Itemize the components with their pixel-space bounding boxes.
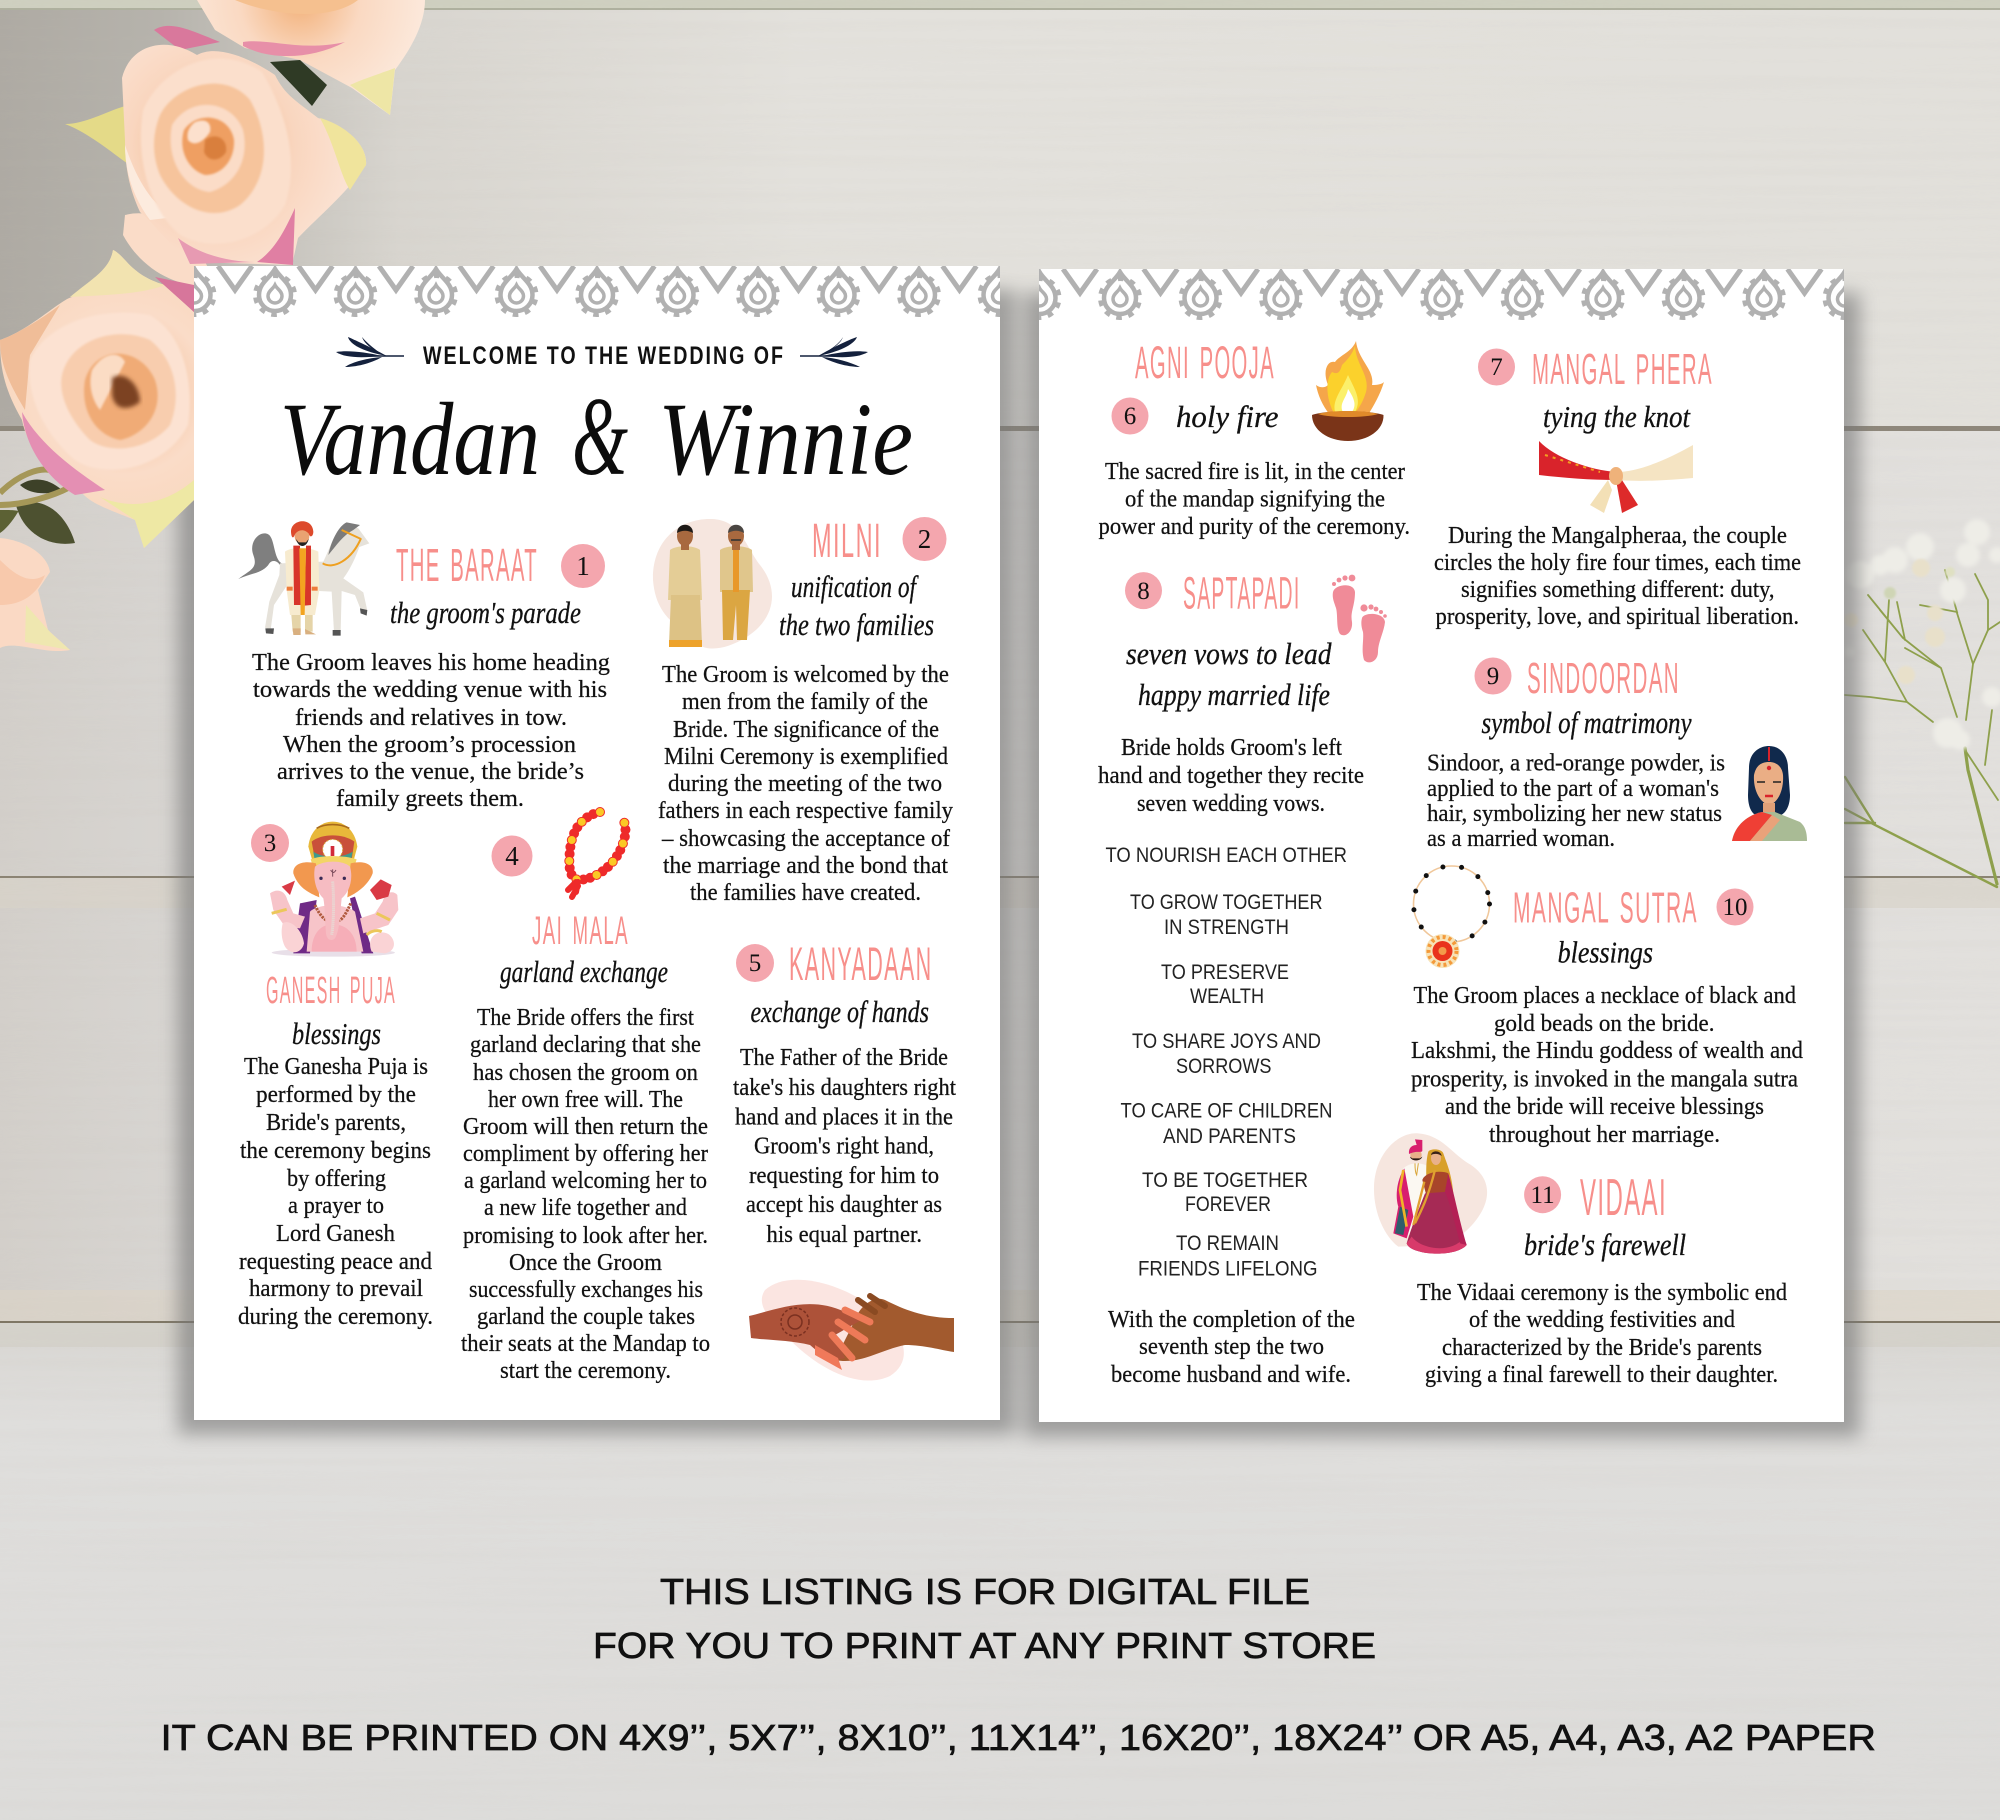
footer note: IT CAN BE PRINTED ON 4X9’’, 5X7’’, 8X10’’, 11X14’’, 16X20’’, 18X24’’ OR A5, A4, A3, A2 PAPER: [161, 1717, 1876, 1758]
icon: tied knot: [1539, 441, 1693, 513]
icon: necklace: [1414, 866, 1490, 968]
body text: garland declaring that she: [470, 1032, 701, 1058]
list: seven vows: TO REMAIN: [1176, 1232, 1279, 1255]
section 11: vidaai: VIDAAI: [1580, 1169, 1667, 1227]
icon: woman with sindoor: [1732, 746, 1807, 841]
section 2: milni: [653, 515, 953, 906]
body text: Bride holds Groom's left: [1121, 735, 1342, 761]
heading: welcome: WELCOME TO THE WEDDING OF: [423, 342, 785, 370]
body text: harmony to prevail: [249, 1276, 423, 1302]
body text: characterized by the Bride's parents: [1442, 1335, 1762, 1361]
section 3: ganesh puja: GANESH PUJA: [266, 970, 396, 1012]
number badge: [1474, 658, 1512, 694]
number badge: [1716, 888, 1754, 926]
body text: [733, 1045, 956, 1248]
number badge: 10: [1722, 894, 1748, 921]
body text: the ceremony begins: [240, 1138, 431, 1164]
leaves and rope: [0, 470, 75, 544]
body text: [1411, 983, 1803, 1148]
icon: bride and groom: [1374, 1133, 1487, 1254]
body text: her own free will. The: [488, 1087, 683, 1113]
closing text: become husband and wife.: [1111, 1362, 1351, 1388]
body text: [461, 1005, 710, 1384]
number badge: [1125, 572, 1162, 609]
body text: When the groom’s procession: [283, 732, 576, 758]
body text: Once the Groom: [509, 1250, 662, 1276]
body text: their seats at the Mandap to: [461, 1331, 710, 1357]
body text: [252, 650, 610, 812]
body text: take's his daughters right: [733, 1075, 956, 1101]
section 4: jai mala: [461, 812, 710, 1384]
title: couple names: Vandan: [280, 382, 540, 497]
pattern: top border right card: [1020, 269, 1864, 318]
body text: accept his daughter as: [746, 1192, 942, 1218]
rose: left large: [0, 250, 194, 548]
body text: [238, 1054, 433, 1330]
body text: prosperity, is invoked in the mangala sutra: [1411, 1066, 1798, 1092]
subtitle: exchange of hands: [750, 994, 929, 1029]
icon: right leaf sprig: [800, 337, 868, 367]
icon: groom and horse: [238, 521, 369, 636]
icon: left leaf sprig: [336, 337, 404, 367]
body text: requesting peace and: [239, 1249, 432, 1275]
number badge: [1478, 348, 1515, 386]
flowers: baby's breath sprig at right: [1844, 519, 2000, 887]
body text: hand and places it in the: [735, 1104, 953, 1130]
icon: ganesha: [270, 822, 398, 957]
body text: The Vidaai ceremony is the symbolic end: [1417, 1280, 1787, 1306]
body text: of the mandap signifying the: [1125, 486, 1385, 512]
panel: right card: [1020, 269, 1864, 1422]
body text: Groom's right hand,: [754, 1134, 934, 1160]
body text: Bride. The significance of the: [673, 717, 939, 743]
list: seven vows: IN STRENGTH: [1164, 916, 1289, 939]
body text: start the ceremony.: [500, 1358, 671, 1384]
body text: The Groom is welcomed by the: [662, 662, 949, 688]
section 6: agni pooja: AGNI POOJA: [1135, 337, 1275, 388]
subtitle: blessings: [292, 1016, 381, 1051]
body text: his equal partner.: [766, 1222, 922, 1248]
body text: During the Mangalpheraa, the couple: [1448, 523, 1787, 549]
body text: successfully exchanges his: [469, 1277, 703, 1303]
icon: footprints: [1332, 575, 1387, 662]
body text: [1098, 459, 1410, 540]
number badge: 6: [1124, 403, 1136, 430]
section 10: mangal sutra: MANGAL SUTRA: [1513, 883, 1698, 932]
body text: by offering: [287, 1166, 386, 1192]
body text: [658, 662, 953, 906]
body text: requesting for him to: [749, 1163, 939, 1189]
body text: Groom will then return the: [463, 1114, 708, 1140]
number badge: [251, 824, 289, 862]
section 10: mangal sutra: [1411, 866, 1803, 1148]
section 9: sindoordan: [1427, 654, 1807, 852]
body text: during the ceremony.: [238, 1304, 433, 1330]
body text: seven wedding vows.: [1137, 791, 1325, 817]
body text: Lakshmi, the Hindu goddess of wealth and: [1411, 1038, 1803, 1064]
body text: the marriage and the bond that: [663, 853, 948, 879]
body text: The Groom leaves his home heading: [252, 650, 610, 676]
rose: bottom left: [0, 538, 70, 651]
list: seven vows: TO PRESERVE: [1161, 961, 1289, 984]
body text: Milni Ceremony is exemplified: [664, 744, 948, 770]
body text: The Groom places a necklace of black and: [1414, 983, 1796, 1009]
body text: The Father of the Bride: [740, 1045, 948, 1071]
section 1: the baraat: [238, 521, 610, 812]
subtitle: holy fire: [1176, 399, 1279, 434]
list: seven vows: TO NOURISH EACH OTHER: [1106, 844, 1347, 867]
list: seven vows: WEALTH: [1190, 985, 1264, 1008]
section 8: saptapadi: [1098, 568, 1387, 1388]
section 4: jai mala: JAI MALA: [532, 909, 629, 953]
section 2: milni: MILNI: [812, 515, 882, 568]
body text: as a married woman.: [1427, 826, 1615, 852]
list: seven vows: [1106, 844, 1347, 1280]
body text: hand and together they recite: [1098, 763, 1364, 789]
icon: two men: [653, 519, 772, 649]
body text: The sacred fire is lit, in the center: [1105, 459, 1405, 485]
number badge: [736, 944, 774, 982]
card shadows: [178, 290, 1860, 1437]
section 11: vidaai: [1374, 1133, 1787, 1388]
subtitle: [779, 569, 934, 642]
subtitle: [1126, 636, 1332, 712]
number badge: 4: [505, 841, 519, 871]
body text: arrives to the venue, the bride’s: [277, 759, 584, 785]
number badge: [902, 517, 946, 561]
list: seven vows: TO SHARE JOYS AND: [1132, 1030, 1321, 1053]
number badge: 1: [576, 551, 590, 581]
footer note: THIS LISTING IS FOR DIGITAL FILE: [660, 1571, 1310, 1612]
list: seven vows: SORROWS: [1176, 1055, 1272, 1078]
subtitle: blessings: [1558, 934, 1653, 969]
closing text: [1108, 1307, 1355, 1388]
section 7: mangal phera: [1434, 345, 1801, 630]
body text: [1417, 1280, 1787, 1388]
section 6: agni pooja: [1098, 337, 1410, 540]
body text: during the meeting of the two: [668, 771, 942, 797]
list: seven vows: FRIENDS LIFELONG: [1138, 1258, 1318, 1280]
number badge: [1524, 1176, 1561, 1213]
closing text: With the completion of the: [1108, 1307, 1355, 1333]
title: couple names: &: [572, 375, 628, 499]
section 8: saptapadi: SAPTAPADI: [1183, 568, 1300, 619]
list: seven vows: TO CARE OF CHILDREN: [1120, 1100, 1332, 1122]
title: couple names: [280, 375, 913, 499]
body text: hair, symbolizing her new status: [1427, 801, 1722, 827]
body text: performed by the: [256, 1082, 416, 1108]
body text: has chosen the groom on: [473, 1060, 698, 1086]
body text: throughout her marriage.: [1489, 1122, 1720, 1148]
body text: a new life together and: [484, 1195, 687, 1221]
panel: left card: [175, 266, 1019, 1420]
closing text: seventh step the two: [1139, 1334, 1324, 1360]
number badge: 3: [264, 830, 276, 857]
body text: a prayer to: [288, 1193, 384, 1219]
number badge: [561, 544, 605, 588]
number badge: [492, 836, 532, 876]
pattern: top border left card: [175, 266, 1019, 314]
list: seven vows: TO BE TOGETHER: [1142, 1169, 1308, 1192]
list: seven vows: FOREVER: [1185, 1193, 1271, 1216]
flowers: roses at top left: [0, 0, 425, 651]
icon: garland: [568, 812, 625, 897]
number badge: 9: [1487, 663, 1499, 690]
section 5: kanyadaan: KANYADAAN: [789, 937, 932, 990]
body text: – showcasing the acceptance of: [661, 826, 950, 852]
subtitle: tying the knot: [1543, 399, 1691, 434]
list: seven vows: TO GROW TOGETHER: [1130, 891, 1322, 914]
body text: Bride's parents,: [266, 1110, 406, 1136]
section 9: sindoordan: SINDOORDAN: [1527, 654, 1680, 703]
body text: The Ganesha Puja is: [244, 1054, 428, 1080]
number badge: 7: [1490, 354, 1503, 381]
subtitle: bride's farewell: [1524, 1227, 1686, 1262]
body text: and the bride will receive blessings: [1445, 1094, 1764, 1120]
body text: friends and relatives in tow.: [295, 705, 567, 731]
body text: gold beads on the bride.: [1494, 1011, 1714, 1037]
body text: men from the family of the: [682, 689, 928, 715]
number badge: 5: [749, 950, 761, 977]
subtitle: symbol of matrimony: [1482, 705, 1692, 740]
body text: power and purity of the ceremony.: [1098, 514, 1410, 540]
body text: garland the couple takes: [477, 1304, 695, 1330]
subtitle: the groom's parade: [390, 595, 581, 630]
rose: middle: [65, 45, 366, 286]
title: couple names: Winnie: [658, 382, 913, 497]
subtitle: happy married life: [1138, 677, 1330, 712]
section 1: the baraat: THE BARAAT: [396, 539, 538, 591]
body text: a garland welcoming her to: [464, 1168, 707, 1194]
footer note: FOR YOU TO PRINT AT ANY PRINT STORE: [593, 1625, 1376, 1666]
rose: top: [154, 0, 425, 115]
body text: giving a final farewell to their daughter.: [1425, 1362, 1778, 1388]
body text: towards the wedding venue with his: [253, 677, 607, 703]
body text: [1434, 523, 1801, 630]
body text: applied to the part of a woman's: [1427, 776, 1719, 802]
body text: circles the holy fire four times, each time: [1434, 550, 1801, 576]
body text: the families have created.: [690, 880, 921, 906]
body text: fathers in each respective family: [658, 798, 953, 824]
body text: of the wedding festivities and: [1469, 1307, 1735, 1333]
icon: holy fire: [1312, 341, 1384, 441]
body text: Lord Ganesh: [276, 1221, 395, 1247]
body text: prosperity, love, and spiritual liberation.: [1436, 604, 1799, 630]
number badge: 2: [918, 524, 931, 554]
body text: [1427, 750, 1725, 852]
body text: promising to look after her.: [463, 1223, 708, 1249]
section 7: mangal phera: MANGAL PHERA: [1532, 345, 1713, 394]
body text: family greets them.: [336, 786, 524, 812]
body text: Sindoor, a red-orange powder, is: [1427, 750, 1725, 776]
list: seven vows: AND PARENTS: [1163, 1125, 1296, 1148]
subtitle: seven vows to lead: [1126, 636, 1332, 671]
footer note: [161, 1571, 1876, 1758]
body text: signifies something different: duty,: [1461, 577, 1774, 603]
section 3: ganesh puja: [238, 822, 433, 1330]
number badge: 8: [1137, 578, 1150, 605]
subtitle: unification of: [791, 569, 919, 604]
subtitle: garland exchange: [500, 954, 668, 989]
body text: compliment by offering her: [463, 1141, 708, 1167]
body text: [1098, 735, 1364, 817]
section 5: kanyadaan: [733, 937, 956, 1381]
icon: joined hands: [749, 1280, 954, 1381]
subtitle: the two families: [779, 607, 934, 642]
body text: The Bride offers the first: [477, 1005, 694, 1031]
number badge: 11: [1531, 1182, 1555, 1209]
number badge: [1112, 398, 1148, 434]
